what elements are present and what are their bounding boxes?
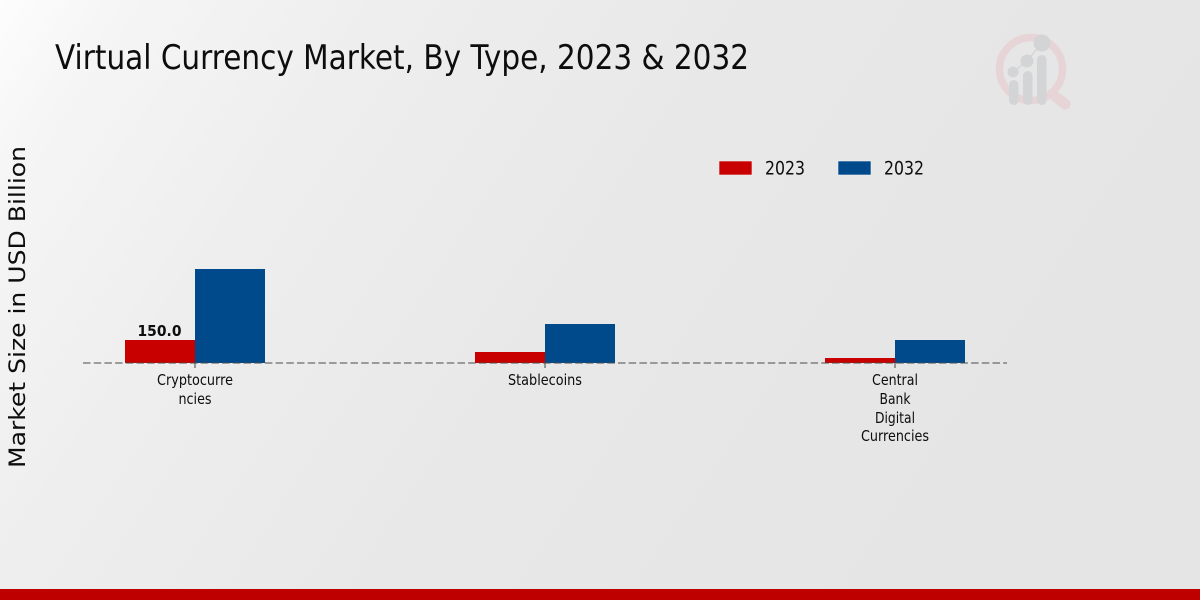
legend	[719, 158, 924, 180]
legend swatch 2023	[719, 161, 752, 175]
x axis baseline	[83, 362, 1007, 364]
bars: Central Bank Digital Currencies	[825, 340, 965, 363]
bar chart	[83, 269, 1007, 445]
legend label 2032: 2032	[884, 158, 924, 180]
category label: Central Bank Digital Currencies: Currencies	[861, 427, 929, 445]
category label: Central Bank Digital Currencies: Central	[872, 371, 918, 389]
category label: Central Bank Digital Currencies: Digital	[875, 409, 915, 427]
bars: Cryptocurrencies	[125, 269, 265, 363]
icon: watermark logo magnifier with bars	[1000, 34, 1071, 110]
category label: Central Bank Digital Currencies	[861, 371, 929, 445]
category label: Cryptocurrencies: Cryptocurre	[157, 371, 233, 389]
category label: Cryptocurrencies	[157, 371, 233, 408]
category label: Cryptocurrencies: ncies	[178, 390, 212, 408]
legend swatch 2032	[838, 161, 871, 175]
category label: Central Bank Digital Currencies: Bank	[880, 390, 911, 408]
title: Virtual Currency Market, By Type, 2023 & 2032	[55, 38, 749, 78]
footer bar	[0, 589, 1200, 600]
axis ticks	[195, 363, 895, 368]
bars: Stablecoins	[475, 324, 615, 363]
category label: Stablecoins: Stablecoins	[508, 371, 582, 389]
y axis label: Market Size in USD Billion	[5, 146, 31, 468]
legend label 2023: 2023	[765, 158, 805, 180]
value label: 150.0	[138, 322, 182, 340]
